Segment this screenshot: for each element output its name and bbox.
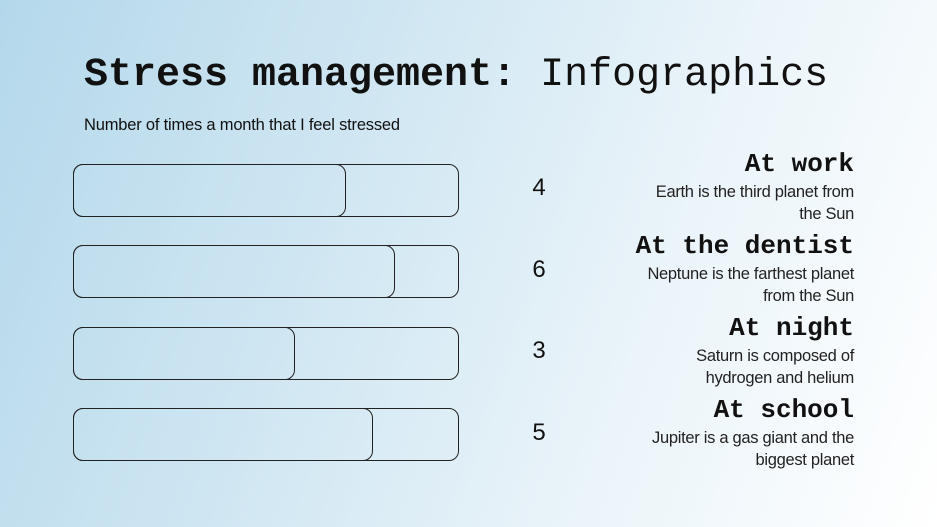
bar: at night	[73, 327, 459, 380]
number 5: 5	[532, 419, 546, 446]
text: at the dentist: Neptune is the farthest planet	[647, 265, 854, 283]
number 6: 6	[532, 256, 546, 283]
text: at school: biggest planet	[755, 451, 854, 469]
text: at work: the Sun	[799, 205, 854, 223]
text: at school	[652, 429, 854, 469]
heading: at work: At work	[745, 149, 854, 179]
text: at work	[656, 183, 854, 223]
bar: at work	[73, 164, 459, 217]
title: Stress management: Infographics	[84, 53, 828, 98]
heading: at night: At night	[729, 313, 854, 343]
bar: at the dentist	[73, 245, 459, 298]
text: at the dentist	[647, 265, 854, 305]
number 3: 3	[532, 337, 546, 364]
subtitle: Number of times a month that I feel stressed	[84, 116, 400, 134]
text: at night: hydrogen and helium	[706, 369, 854, 387]
bar: at school	[73, 408, 459, 461]
text: at night: Saturn is composed of	[696, 347, 854, 365]
number 4: 4	[532, 174, 546, 201]
text: at the dentist: from the Sun	[763, 287, 854, 305]
text: at work: Earth is the third planet from	[656, 183, 854, 201]
text: at school: Jupiter is a gas giant and the	[652, 429, 854, 447]
heading: at school: At school	[714, 395, 854, 425]
heading: at the dentist: At the dentist	[636, 231, 854, 261]
text: at night	[696, 347, 854, 387]
